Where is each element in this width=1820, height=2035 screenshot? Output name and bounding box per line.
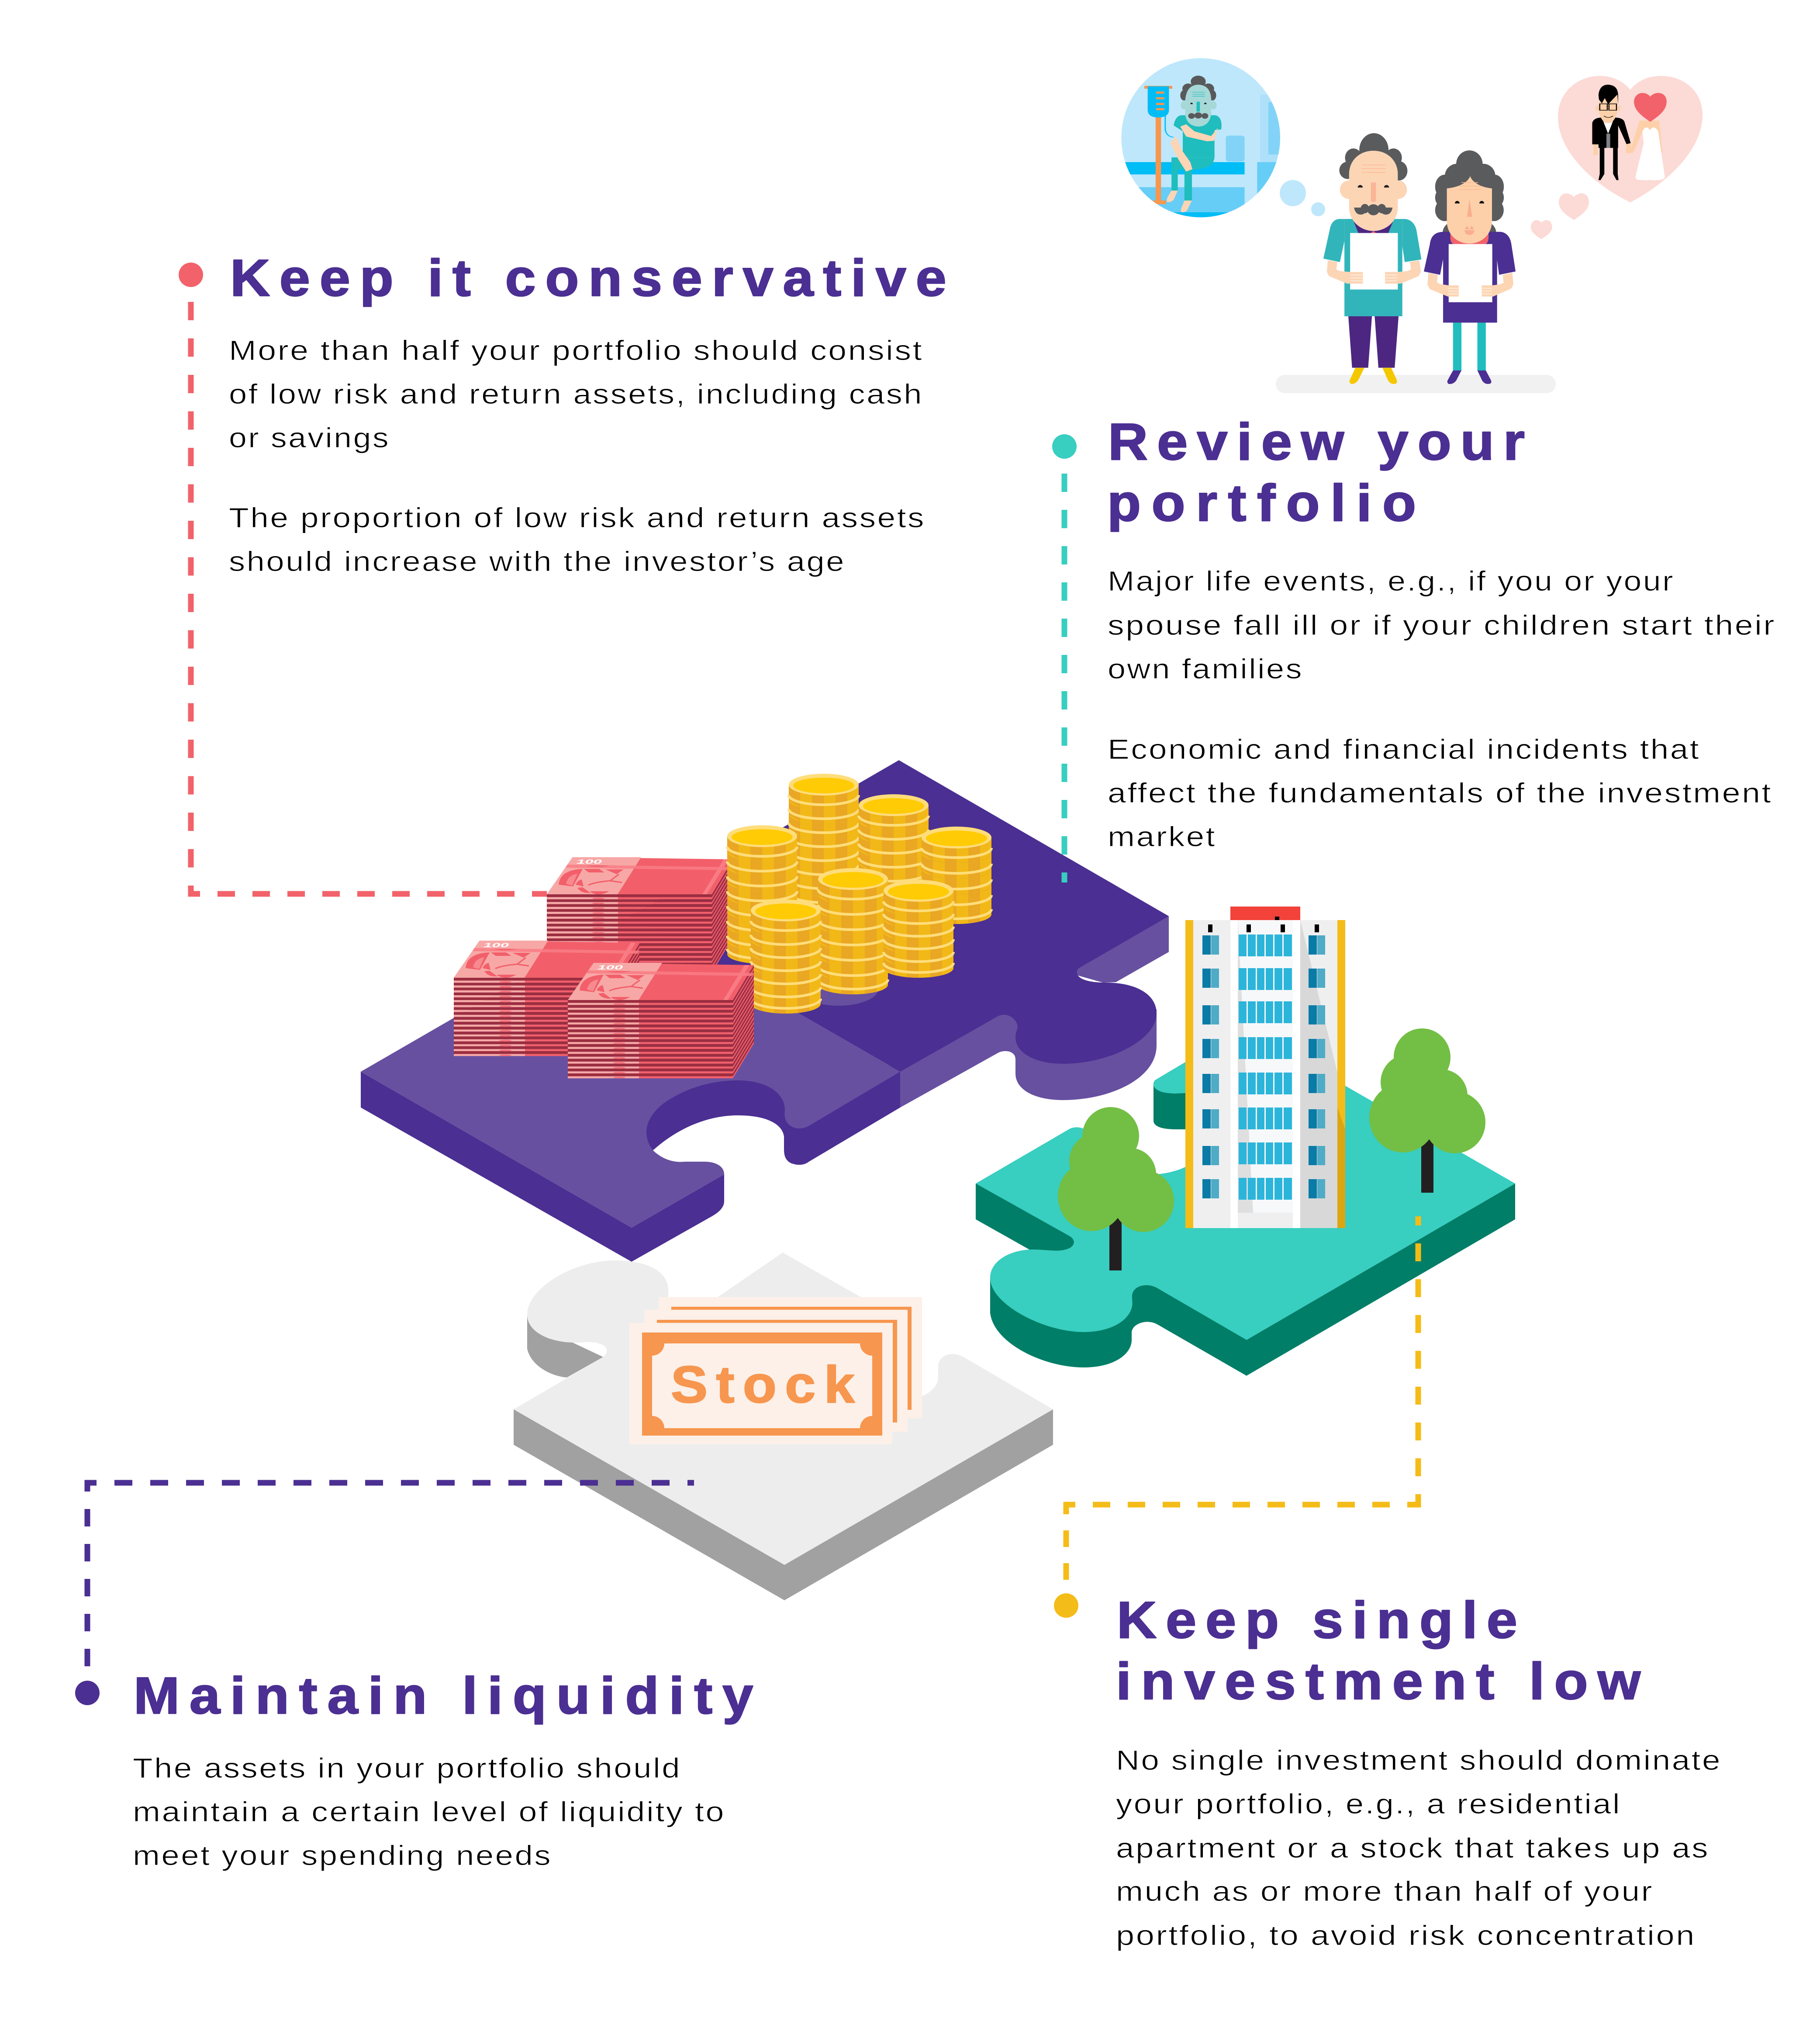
puzzle piece: cash and gold (purple) xyxy=(361,760,1169,1262)
body text: apartment or a stock that takes up as xyxy=(1116,1832,1709,1864)
heading: investment low xyxy=(1116,1652,1641,1710)
heading: Maintain liquidity xyxy=(134,1666,753,1724)
body text: Major life events, e.g., if you or your xyxy=(1108,565,1675,597)
icon: stock certificates: Stock xyxy=(671,1355,855,1413)
banknote stack: left: 100 xyxy=(483,941,509,948)
panel: maintain liquidity xyxy=(75,1666,753,1871)
connector: teal dashed line xyxy=(1061,474,1067,883)
heading: Keep it conservative xyxy=(230,249,946,307)
body text: market xyxy=(1108,821,1216,852)
body text: The proportion of low risk and return assets xyxy=(229,502,926,533)
body text xyxy=(229,335,926,577)
body text: much as or more than half of your xyxy=(1116,1876,1654,1907)
icon: right tree xyxy=(1369,1028,1485,1193)
body text: portfolio, to avoid risk concentration xyxy=(1116,1920,1696,1951)
marker dot xyxy=(75,1681,100,1705)
illustration: elderly man holding paper xyxy=(1323,133,1421,384)
connector: purple dashed line xyxy=(85,1480,694,1666)
heading xyxy=(1116,1591,1641,1710)
connector: coral dashed line xyxy=(188,302,547,896)
gold coin stacks xyxy=(727,774,991,1014)
body text: or savings xyxy=(229,422,390,453)
heading: Keep single xyxy=(1117,1591,1517,1649)
heading xyxy=(1107,412,1525,532)
body text: More than half your portfolio should consist xyxy=(229,335,923,366)
banknote stack: front: 100 xyxy=(597,964,623,971)
connector: yellow dashed line xyxy=(1064,1216,1421,1580)
puzzle piece: stock (grey) xyxy=(514,1253,1053,1600)
body text: your portfolio, e.g., a residential xyxy=(1116,1788,1621,1820)
body text xyxy=(133,1752,725,1871)
panel: keep single investment low xyxy=(1054,1591,1722,1951)
body text: should increase with the investor’s age xyxy=(229,546,846,577)
icon: stock certificates xyxy=(629,1297,922,1444)
banknote stack: back xyxy=(547,857,733,973)
illustration: elderly woman holding paper xyxy=(1424,150,1516,384)
body text xyxy=(1108,565,1776,852)
puzzle piece: property (teal) xyxy=(976,1028,1515,1376)
body text: affect the fundamentals of the investment xyxy=(1108,777,1772,809)
banknote stack: front xyxy=(568,963,754,1078)
illustration: wedding heart thought bubble xyxy=(1531,76,1703,239)
marker dot xyxy=(1052,434,1077,459)
body text: meet your spending needs xyxy=(133,1840,552,1871)
banknote stack: left xyxy=(454,941,640,1056)
panel: review your portfolio xyxy=(1052,412,1776,852)
body text: No single investment should dominate xyxy=(1116,1744,1722,1776)
body text: The assets in your portfolio should xyxy=(133,1752,681,1784)
body text: of low risk and return assets, including cash xyxy=(229,378,923,410)
body text: Economic and financial incidents that xyxy=(1108,734,1700,765)
heading: Review your xyxy=(1108,412,1525,471)
body text: maintain a certain level of liquidity to xyxy=(133,1796,725,1827)
marker dot xyxy=(179,263,203,287)
ground shadow xyxy=(1276,375,1556,393)
body text xyxy=(1116,1744,1722,1951)
illustration: hospital thought bubble xyxy=(1119,57,1286,220)
panel: keep it conservative xyxy=(179,249,946,577)
banknote stack: back: 100 xyxy=(577,858,602,865)
icon: apartment building xyxy=(1185,907,1345,1228)
body text: spouse fall ill or if your children start their xyxy=(1108,609,1776,641)
thought bubbles: blue xyxy=(1280,180,1325,216)
heading: portfolio xyxy=(1107,474,1416,532)
marker dot xyxy=(1054,1593,1078,1618)
icon: left tree xyxy=(1058,1107,1174,1270)
body text: own families xyxy=(1108,653,1303,685)
